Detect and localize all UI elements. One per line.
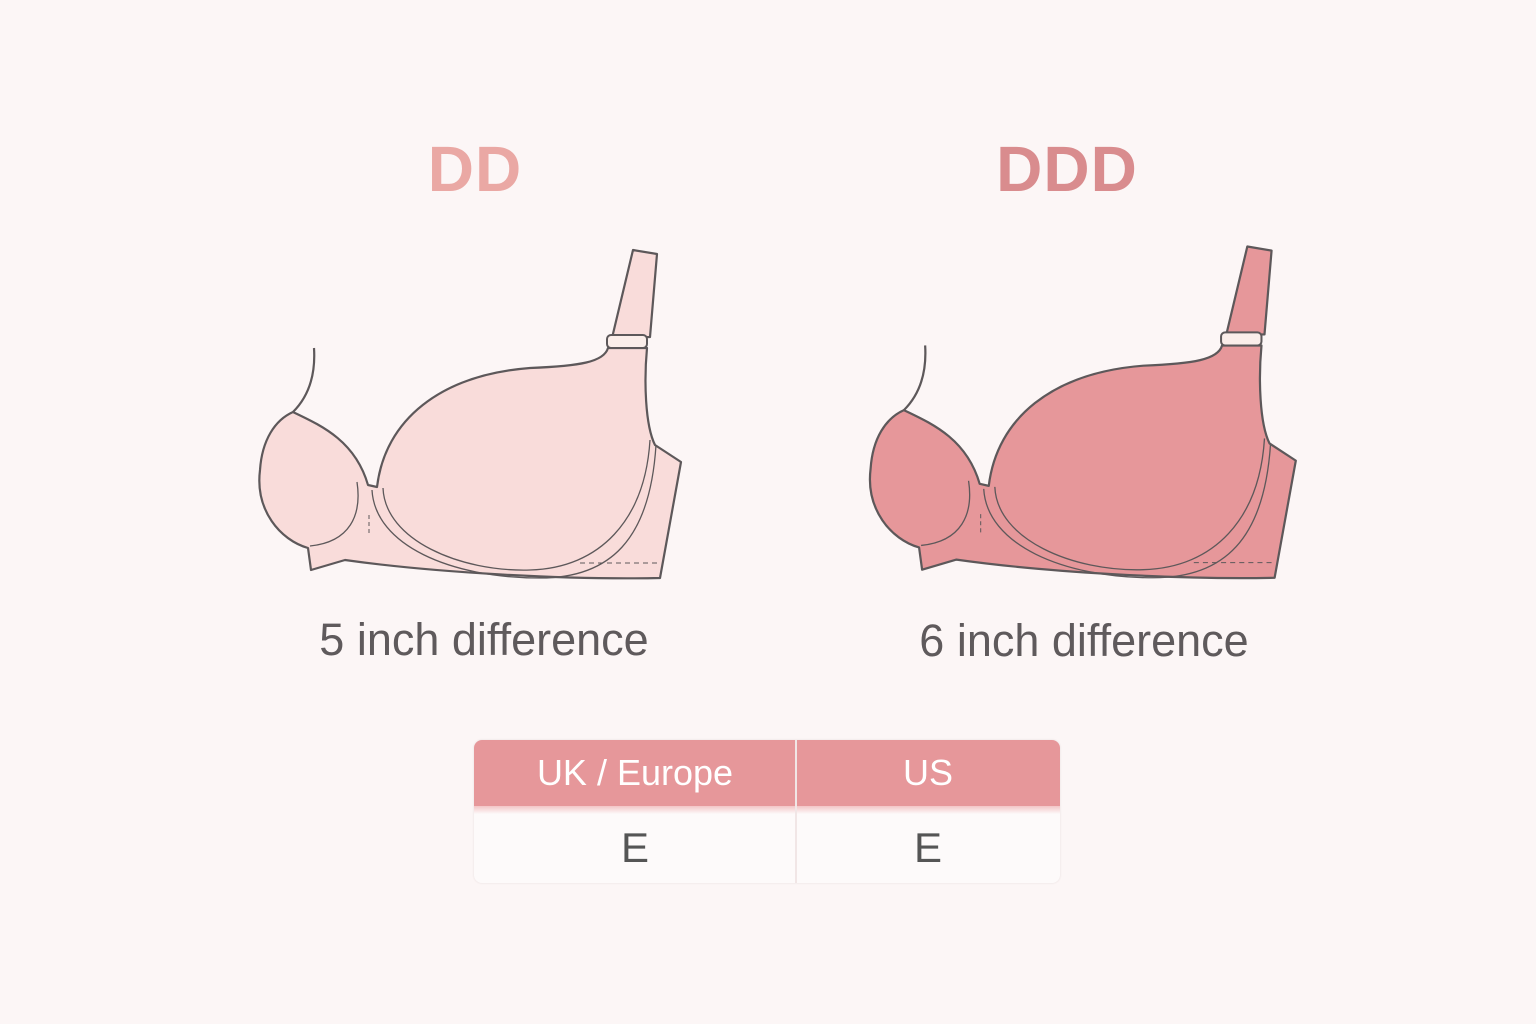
header: UK / Europe: UK / Europe	[537, 752, 733, 793]
bra: DDD	[870, 246, 1296, 578]
title: DD: DD	[428, 133, 522, 205]
bra: DD	[259, 250, 681, 578]
cell: E: E	[621, 824, 649, 871]
label: 6 inch difference: 6 inch difference	[919, 615, 1249, 666]
cell: E: E	[914, 824, 942, 871]
header: US: US	[903, 752, 953, 793]
table: size conversion	[474, 740, 1060, 883]
table header	[474, 740, 1060, 806]
title: DDD: DDD	[996, 133, 1138, 205]
label: 5 inch difference: 5 inch difference	[319, 614, 649, 665]
